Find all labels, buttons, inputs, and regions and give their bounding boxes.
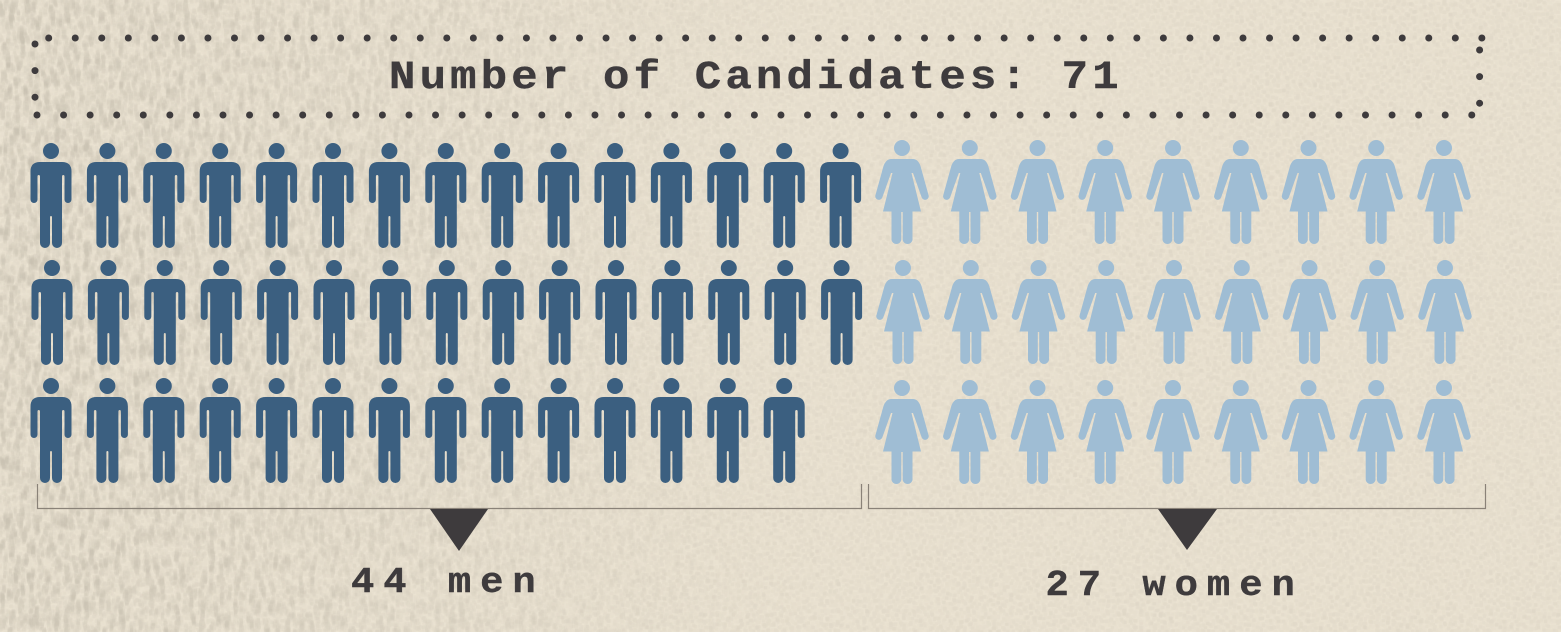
title: Number of Candidates: 71 (389, 55, 1123, 100)
label: 44 men: 44 men (351, 563, 545, 604)
women pictogram: 27 figures (875, 140, 1472, 484)
arrow: men pointer (430, 509, 488, 551)
women row 2 (876, 260, 1472, 364)
men pictogram: 44 figures (30, 143, 862, 483)
arrow: women pointer (1158, 509, 1217, 550)
label: 27 women: 27 women (1046, 566, 1304, 607)
bracket: men (38, 484, 862, 508)
women row 3 (875, 380, 1471, 484)
bracket: women (868, 484, 1486, 508)
dotted title frame (35, 38, 1482, 115)
men row 2 (32, 260, 862, 365)
women row 1 (875, 140, 1471, 244)
men row 1 (30, 143, 861, 248)
men row 3 (30, 378, 805, 483)
